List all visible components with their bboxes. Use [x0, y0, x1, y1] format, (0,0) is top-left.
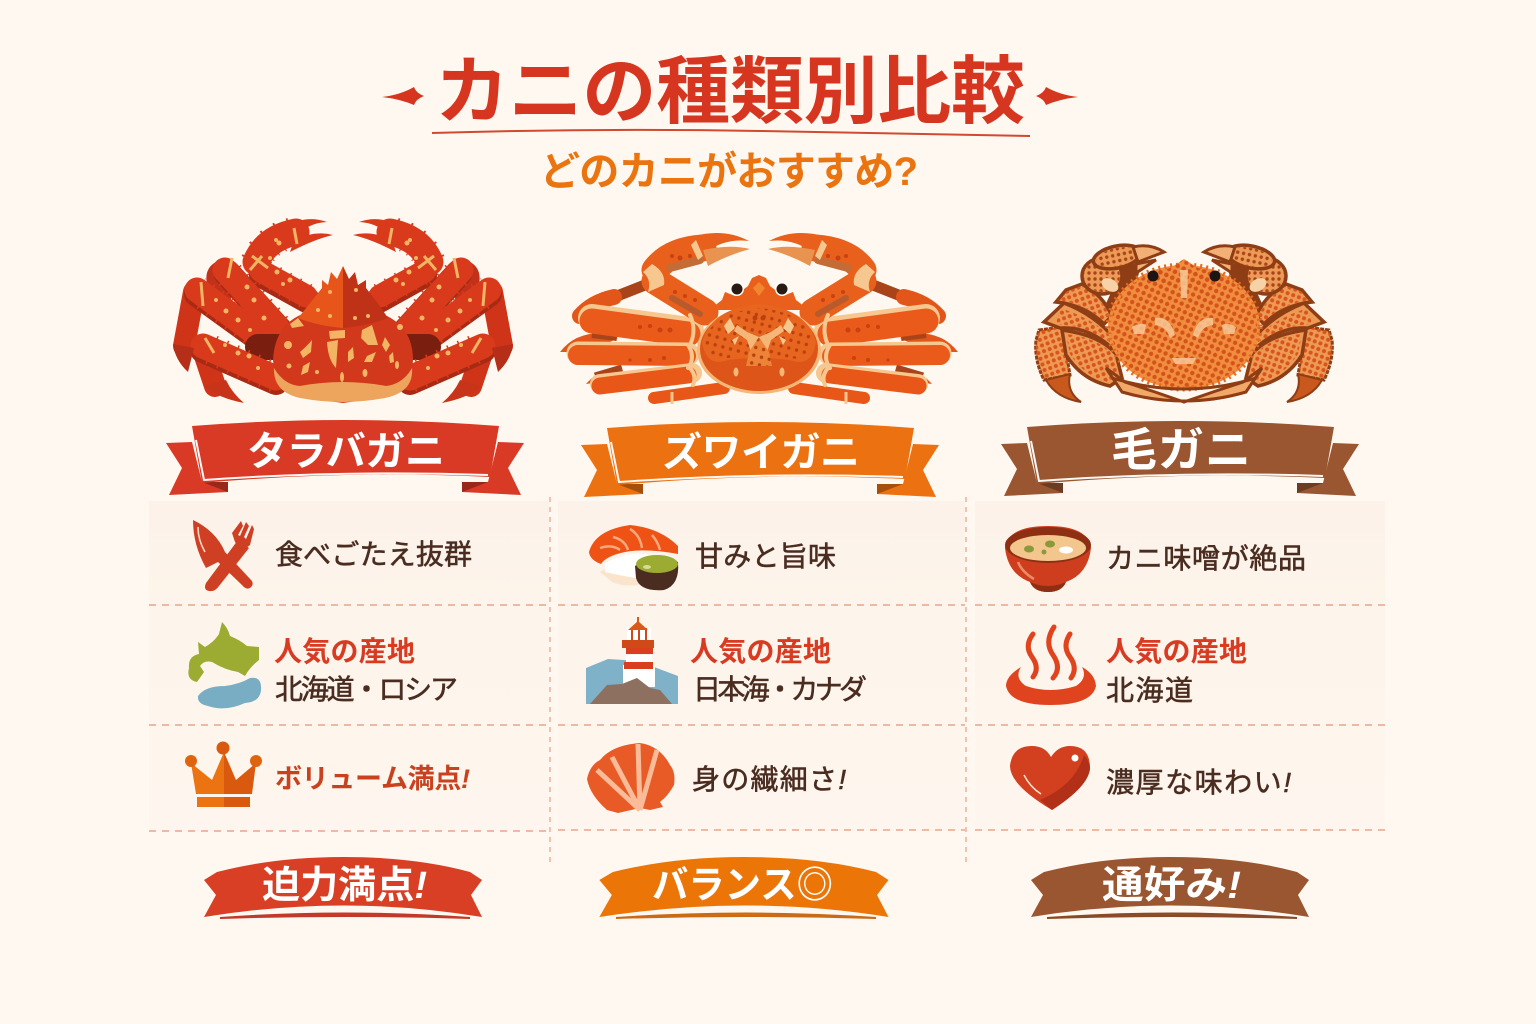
name ribbon: [1001, 421, 1359, 496]
panel: ズワイガニ: [560, 233, 958, 918]
name ribbon: ズワイガニ: [662, 431, 860, 475]
text: 食べごたえ抜群: [275, 539, 472, 570]
value: 日本海・カナダ: [693, 674, 867, 705]
crab illustration: hairy crab: [1036, 241, 1332, 402]
title underline: [432, 130, 1030, 136]
icon: scallop shell: [587, 743, 674, 813]
left ornament: [382, 87, 424, 105]
verdict ribbon: [1031, 857, 1309, 918]
icon: heart: [1010, 746, 1090, 810]
crab illustration: king crab: [173, 219, 513, 403]
icon: lighthouse: [586, 617, 678, 704]
name ribbon: [581, 422, 939, 497]
verdict ribbon: 迫力満点!: [262, 865, 427, 907]
title: カニの種類別比較: [435, 50, 1025, 133]
row: feature: [1010, 746, 1291, 810]
crab illustration: snow crab: [560, 233, 958, 404]
table background and dashed dividers: [149, 497, 1385, 862]
row: feature: [587, 743, 846, 813]
text: ボリューム満点!: [275, 764, 470, 794]
label: 人気の産地: [1106, 636, 1247, 667]
row: origin: [188, 622, 458, 708]
verdict ribbon: バランス◎: [652, 865, 833, 907]
value: 北海道・ロシア: [275, 674, 458, 705]
icon: hot spring: [1006, 627, 1096, 705]
row: origin: [1006, 627, 1247, 706]
icon: sushi and wasabi: [589, 525, 678, 590]
verdict ribbon: [204, 857, 482, 918]
verdict ribbon: 通好み !: [1102, 865, 1241, 907]
name ribbon: 毛ガニ: [1111, 424, 1251, 476]
label: 人気の産地: [274, 636, 415, 667]
panel: 毛ガニ: [1001, 241, 1359, 918]
right ornament: [1036, 87, 1078, 105]
name ribbon: タラバガニ: [247, 430, 445, 474]
row: origin: [586, 617, 867, 705]
text: カニ味噌が絶品: [1106, 543, 1306, 574]
panel: タラバガニ: [166, 219, 524, 918]
text: 甘みと旨味: [695, 541, 836, 572]
icon: knife and fork: [193, 520, 254, 591]
row: feature: [185, 742, 470, 807]
verdict ribbon: [599, 857, 888, 918]
row: taste: [589, 525, 836, 590]
text: 濃厚な味わい!: [1106, 767, 1291, 798]
subtitle: どのカニがおすすめ?: [540, 150, 918, 194]
icon: crown: [185, 742, 262, 807]
row: texture: [193, 520, 472, 591]
title block: [382, 50, 1078, 194]
icon: Hokkaido map: [188, 622, 261, 708]
value: 北海道: [1106, 675, 1193, 706]
name ribbon: [166, 420, 524, 495]
label: 人気の産地: [690, 636, 831, 667]
row: taste: [1005, 526, 1306, 592]
icon: miso soup bowl: [1005, 526, 1091, 592]
text: 身の繊細さ!: [692, 764, 846, 795]
